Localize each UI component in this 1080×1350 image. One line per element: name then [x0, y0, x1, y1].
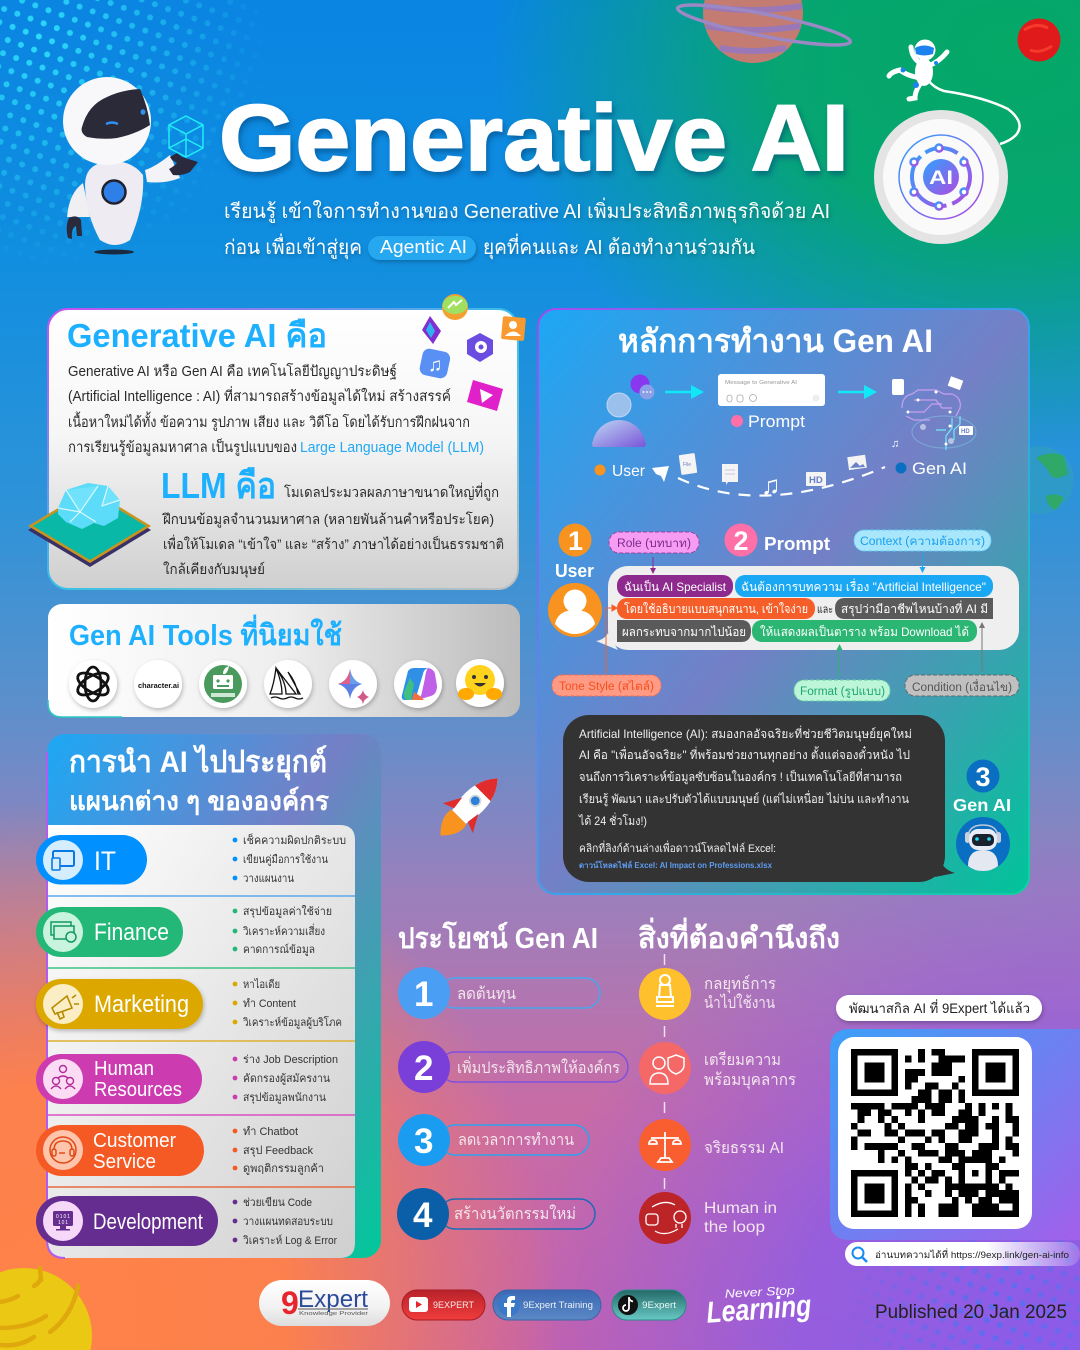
logo: 9Expert: Expert — [298, 1286, 368, 1313]
department: Human Resources: สรุปข้อมูลพนักงาน — [243, 1092, 326, 1104]
step 2: Prompt: Prompt — [764, 534, 830, 554]
text block: definition: เนื้อหาใหม่ได้ทั้ง ข้อความ รูปภาพ เสียง และ วิดีโอ โดยได้รับการฝึกฝนจาก — [68, 411, 470, 431]
consideration: strategy — [639, 968, 776, 1020]
icons: floating media icons — [418, 294, 526, 411]
tag: Format — [794, 680, 890, 701]
step 1: User: User — [555, 561, 594, 581]
link: article URL: อ่านบทความได้ที่ https://9exp.link/gen-ai-info — [875, 1248, 1069, 1261]
prompt box: Message to Generative AI — [725, 380, 798, 386]
panel: how Gen AI works — [538, 309, 1029, 894]
arrow: prompt to Gen AI — [838, 385, 877, 399]
department: IT: IT — [94, 846, 116, 876]
benefit 3: ลดเวลาการทำงาน — [458, 1132, 574, 1149]
consideration: human in the loop — [639, 1192, 777, 1244]
arrow: Condition — [979, 622, 985, 672]
department: Finance: คาดการณ์ข้อมูล — [243, 943, 315, 956]
prompt bubble: ให้แสดงผลเป็นตาราง พร้อม Download ได้ — [760, 624, 969, 639]
logo: 9Expert — [259, 1280, 390, 1326]
Gen AI response bubble — [563, 715, 955, 882]
icon: character.ai: character.ai — [138, 681, 179, 690]
Gen AI response bubble: Artificial Intelligence (AI): สมองกลอัจฉริยะที่ช่วยชีวิตมนุษย์ยุคใหม่ — [579, 725, 912, 742]
step 3: Gen AI: 3 — [976, 762, 991, 792]
benefit 4: สร้างนวัตกรรมใหม่ — [454, 1204, 576, 1223]
social: TikTok: 9Expert — [642, 1300, 676, 1311]
publish date: Published 20 Jan 2025 — [875, 1302, 1067, 1323]
icon: AI brain: ♫ — [891, 438, 899, 450]
Gen AI response bubble: จนถึงการวิเคราะห์ข้อมูลซับซ้อนในองค์กร ! เป็นเทคโนโลยีที่สามารถ — [579, 768, 902, 785]
Gen AI response bubble: AI คือ "เพื่อนอัจฉริยะ" ที่พร้อมช่วยงานทุกอย่าง ตั้งแต่จองตั๋วหนัง ไป — [579, 745, 910, 763]
heading: principle: หลักการทำงาน Gen AI — [618, 323, 933, 359]
Gen AI response bubble: เรียนรู้ พัฒนา และปรับตัวได้แบบมนุษย์ (แต่ไม่เหนื่อย ไม่บ่น และทำงาน — [579, 790, 909, 807]
text block: LLM definition: ฝึกบนข้อมูลจำนวนมหาศาล (หลายพันล้านคำหรือประโยค) — [162, 511, 494, 528]
text block: definition: Large Language Model (LLM) — [300, 440, 484, 456]
Gen AI response bubble: ได้ 24 ชั่วโมง!) — [578, 812, 647, 828]
department: Human Resources: ร่าง Job Description — [243, 1054, 338, 1066]
icon: rocket — [425, 763, 513, 851]
social: YouTube — [402, 1290, 485, 1320]
subtitle: ยุคที่คนและ AI ต้องทำงานร่วมกัน — [483, 233, 755, 260]
panel: QR code — [830, 1029, 1080, 1240]
benefit 1 — [398, 967, 600, 1019]
benefit 2: 2 — [414, 1049, 433, 1088]
icon: AI badge: AI — [929, 168, 953, 189]
department: Human Resources: Resources — [94, 1078, 182, 1101]
department: Marketing: วิเคราะห์ข้อมูลผู้บริโภค — [242, 1015, 342, 1029]
department: Marketing: Marketing — [94, 991, 189, 1018]
text block: LLM definition: เพื่อให้โมเดล “เข้าใจ” และ “สร้าง” ภาษาได้อย่างเป็นธรรมชาติ — [163, 535, 504, 552]
prompt bubble: และ — [817, 604, 833, 616]
heading: LLM: LLM คือ — [161, 465, 276, 506]
text block: LLM definition: โมเดลประมวลผลภาษาขนาดใหญ่ที่ถูก — [284, 483, 499, 501]
consideration: strategy: นำไปใช้งาน — [704, 993, 775, 1012]
benefit 1: 1 — [414, 975, 433, 1014]
callout: upskill with 9Expert: พัฒนาสกิล AI ที่ 9Expert ได้แล้ว — [849, 999, 1030, 1016]
icon: user with chat bubbles — [592, 374, 654, 447]
consideration: strategy: กลยุทธ์การ — [704, 974, 776, 994]
department: Development: 101 — [58, 1220, 68, 1226]
tag: Tone Style: Tone Style (สไตล์) — [559, 679, 654, 693]
department: Customer Service: ทำ Chatbot — [243, 1126, 298, 1138]
department: Development: 0101 — [56, 1214, 70, 1220]
text block: definition: Generative AI หรือ Gen AI คือ เทคโนโลยีปัญญาประดิษฐ์ — [68, 362, 397, 380]
icons: floating media icons: ♫ — [428, 355, 442, 376]
label: Prompt: Prompt — [748, 413, 805, 431]
subtitle: ก่อน เพื่อเข้าสู่ยุค — [224, 233, 362, 260]
department: Development — [36, 1196, 337, 1247]
prompt bubble: ฉันต้องการบทความ เรื่อง "Artificial Intelligence" — [741, 578, 986, 594]
department: IT: เช็คความผิดปกติระบบ — [243, 833, 346, 847]
text block: LLM definition — [162, 483, 504, 578]
arrow: user to prompt — [665, 385, 704, 399]
callout: upskill with 9Expert — [836, 995, 1042, 1021]
logo: 9Expert: 9 — [281, 1285, 299, 1321]
department: Finance: Finance — [94, 919, 169, 946]
heading: considerations: สิ่งที่ต้องคำนึงถึง — [638, 917, 840, 955]
decoration: planet top — [676, 0, 852, 63]
icon: Gemini sparkle — [329, 660, 377, 708]
decoration: red planet — [1018, 18, 1060, 62]
tag: Condition: Condition (เงื่อนไข) — [912, 679, 1012, 694]
icon: Copilot — [394, 660, 442, 708]
logo: 9Expert: Knowledge Provider — [299, 1311, 368, 1317]
arrow: output flow to user: File — [683, 462, 691, 468]
arrow: Role — [650, 557, 656, 574]
consideration: people readiness — [639, 1042, 796, 1094]
department: Customer Service — [36, 1125, 324, 1176]
social: TikTok — [612, 1290, 686, 1320]
prompt bubble — [596, 566, 1019, 650]
text block: definition: การเรียนรู้ข้อมูลมหาศาล เป็นรูปแบบของ — [68, 437, 297, 456]
prompt box — [718, 374, 825, 406]
tag: Format: Format (รูปแบบ) — [800, 686, 885, 698]
subtitle: เรียนรู้ เข้าใจการทำงานของ Generative AI เพิ่มประสิทธิภาพธุรกิจด้วย AI — [224, 197, 830, 224]
tag: Context — [854, 530, 991, 551]
department: Customer Service: สรุป Feedback — [243, 1145, 313, 1157]
benefit 3: 3 — [414, 1122, 433, 1161]
benefit 2: เพิ่มประสิทธิภาพให้องค์กร — [457, 1056, 620, 1077]
arrow: Context — [920, 553, 926, 573]
icon: AI brain — [891, 376, 976, 450]
prompt bubble: ฉันเป็น AI Specialist — [624, 579, 727, 594]
department: IT — [36, 833, 346, 885]
icon: AI badge — [874, 110, 1008, 244]
Gen AI response bubble: คลิกที่ลิงก์ด้านล่างเพื่อดาวน์โหลดไฟล์ Excel: — [579, 840, 776, 855]
consideration: people readiness: พร้อมบุคลากร — [704, 1071, 796, 1090]
icon: Qwen robot — [199, 660, 247, 708]
social: YouTube: 9EXPERT — [433, 1300, 474, 1311]
prompt bubble: สรุปว่ามีอาชีพไหนบ้างที่ AI มี — [841, 600, 988, 617]
icon: Midjourney sail — [264, 660, 312, 708]
Gen AI response bubble: ดาวน์โหลดไฟล์ Excel: AI Impact on Professions.xlsx — [579, 860, 773, 870]
arrow: output flow to user: HD — [809, 475, 823, 486]
department: Customer Service: Customer — [93, 1129, 176, 1152]
step 3: Gen AI: Gen AI — [953, 795, 1011, 815]
step 1: User — [548, 524, 602, 637]
icon: robot mascot — [63, 77, 198, 254]
tag: Role — [609, 532, 699, 553]
text block: definition — [68, 362, 484, 456]
consideration: human in the loop: Human in — [704, 1200, 777, 1217]
label: User: User — [612, 463, 646, 480]
department: IT: เขียนคู่มือการใช้งาน — [243, 853, 328, 866]
panel: what is Generative AI — [28, 294, 526, 589]
benefit 4 — [397, 1188, 595, 1240]
department: Development: วิเคราะห์ Log & Error — [242, 1234, 337, 1247]
tag: Tone Style — [552, 675, 661, 696]
label: User — [594, 463, 646, 480]
icon: Hugging Face — [456, 659, 504, 707]
department: Marketing — [36, 978, 342, 1029]
department: Development: ช่วยเขียน Code — [243, 1196, 312, 1209]
heading: benefits: ประโยชน์ Gen AI — [398, 920, 598, 955]
tag: Role: Role (บทบาท) — [617, 538, 691, 550]
step 2: Prompt: 2 — [734, 526, 749, 556]
heading: departments: การนำ AI ไปประยุกต์ — [69, 744, 327, 781]
step 2: Prompt — [724, 524, 830, 556]
icon: AI brain: HD — [961, 429, 970, 435]
benefit 4: 4 — [413, 1196, 433, 1235]
department: Finance: วิเคราะห์ความเสี่ยง — [242, 923, 325, 938]
link: article URL — [845, 1242, 1080, 1266]
benefit 2 — [398, 1041, 628, 1093]
icon: chip with crystal brain — [28, 483, 151, 567]
prompt bubble: โดยใช้อธิบายแบบสนุกสนาน, เข้าใจง่าย — [624, 602, 808, 617]
department: Marketing: หาไอเดีย — [243, 978, 280, 991]
social: Facebook — [493, 1290, 601, 1320]
text block: definition: (Artificial Intelligence : AI) ที่สามารถสร้างข้อมูลได้ใหม่ สร้างสรรค์ — [68, 386, 451, 405]
arrow: Format — [836, 644, 842, 678]
arrow: output flow to user — [652, 453, 885, 500]
icon: character.ai — [134, 660, 182, 708]
subtitle — [224, 197, 830, 260]
label: Gen AI: Gen AI — [912, 459, 967, 478]
benefit 1: ลดต้นทุน — [457, 985, 516, 1004]
title: Generative AI — [219, 85, 849, 190]
text block: LLM definition: ใกล้เคียงกับมนุษย์ — [163, 561, 265, 578]
consideration: ethics: จริยธรรม AI — [704, 1140, 784, 1157]
arrow: output flow to user: ♫ — [761, 470, 780, 500]
heading: Generative AI: Generative AI คือ — [67, 317, 327, 354]
icon: holographic cube — [169, 116, 203, 157]
tag: Condition — [905, 675, 1019, 696]
department: Customer Service: ดูพฤติกรรมลูกค้า — [243, 1163, 324, 1175]
social: Facebook: 9Expert Training — [523, 1300, 593, 1311]
icon: astronaut on tether — [889, 40, 1020, 144]
panel: AI across departments — [36, 734, 381, 1258]
heading: departments — [69, 744, 329, 816]
department: Development: Development — [93, 1209, 203, 1234]
heading: departments: แผนกต่าง ๆ ขององค์กร — [69, 786, 329, 816]
decoration: earth at right edge — [1006, 446, 1074, 514]
heading: tools: Gen AI Tools ที่นิยมใช้ — [69, 614, 342, 652]
consideration: ethics — [639, 1119, 784, 1171]
department: Human Resources — [36, 1054, 338, 1104]
decoration: yellow planet bottom-left — [0, 1268, 92, 1350]
slogan: Never Stop Learning: Never Stop — [724, 1283, 795, 1301]
benefit 3 — [398, 1114, 589, 1166]
subtitle: Agentic AI — [380, 237, 467, 257]
department: Human Resources: คัดกรองผู้สมัครงาน — [243, 1073, 330, 1085]
department: Development: วางแผนทดสอบระบบ — [243, 1216, 333, 1228]
department: Human Resources: Human — [94, 1057, 154, 1080]
step 1: User: 1 — [568, 526, 583, 556]
department: Finance — [36, 905, 332, 957]
department: IT: วางแผนงาน — [243, 873, 294, 885]
consideration: human in the loop: the loop — [704, 1219, 765, 1236]
slogan: Never Stop Learning: Learning — [705, 1289, 812, 1330]
department: Finance: สรุปข้อมูลค่าใช้จ่าย — [243, 905, 332, 918]
panel: Gen AI tools — [48, 604, 520, 717]
arrow: Tone — [606, 605, 617, 673]
department: Customer Service: Service — [93, 1150, 156, 1173]
prompt bubble: ผลกระทบจากมากไปน้อย — [622, 625, 746, 639]
tag: Context: Context (ความต้องการ) — [860, 535, 985, 548]
department: Marketing: ทำ Content — [243, 998, 296, 1010]
step 3: Gen AI — [953, 760, 1011, 871]
consideration: people readiness: เตรียมความ — [704, 1051, 781, 1069]
icon: ChatGPT — [69, 660, 117, 708]
